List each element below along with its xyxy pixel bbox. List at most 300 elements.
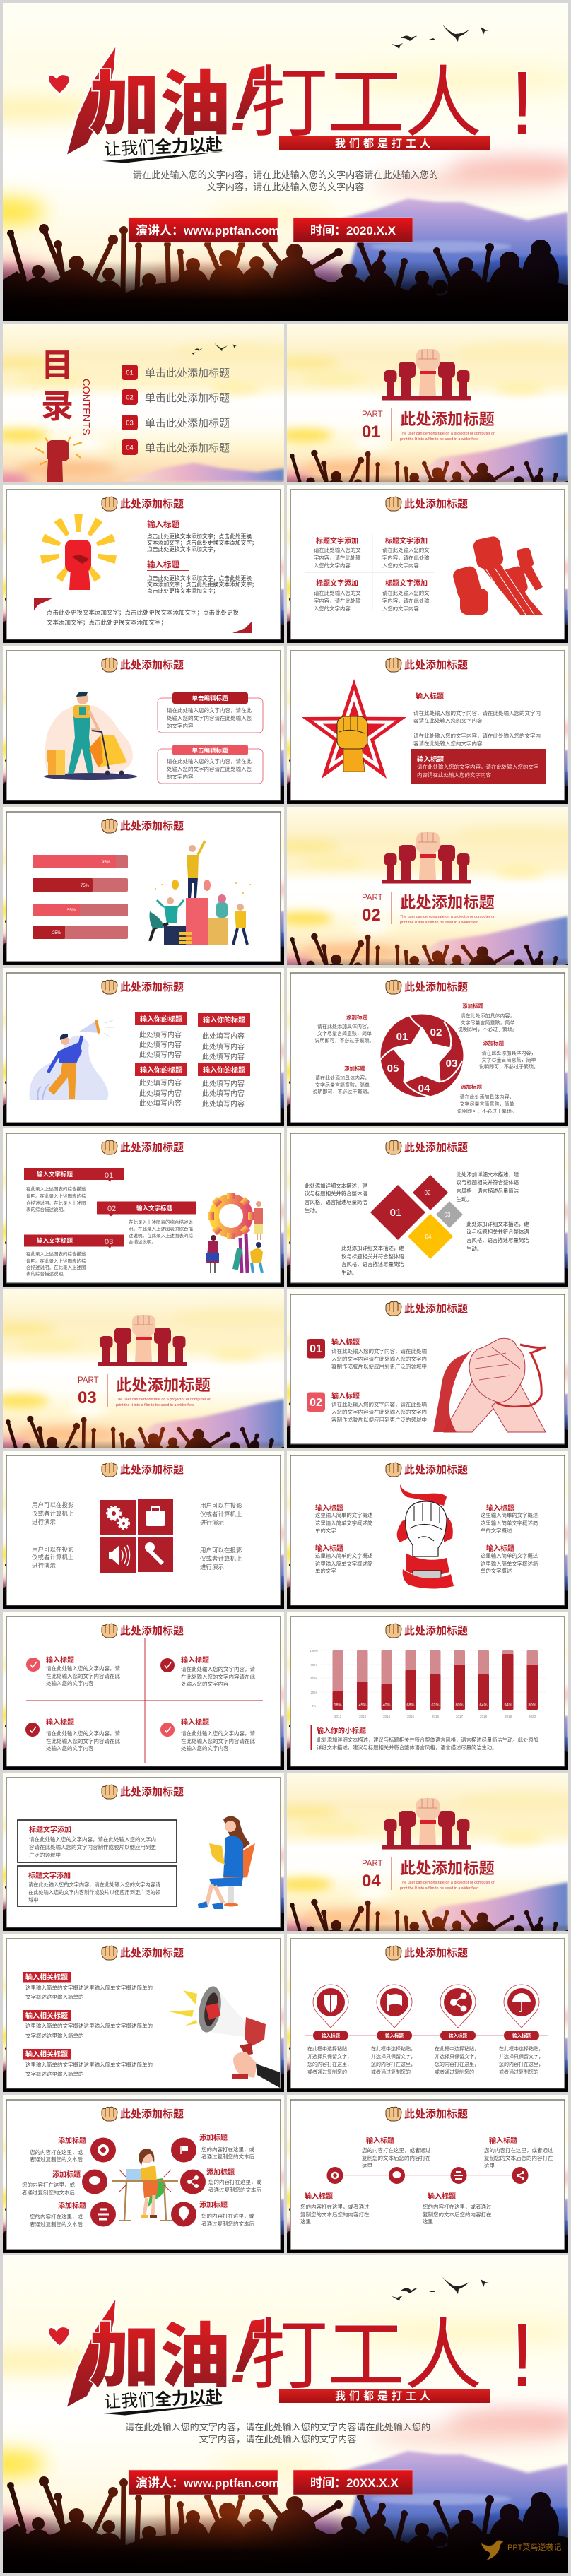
text left top: 仪或者计算机上 — [32, 1510, 74, 1517]
icon: briefcase — [146, 1507, 165, 1526]
label 2: 请在此处添加具体内容， — [315, 1075, 370, 1081]
text grid: 标题文字添加 — [316, 579, 358, 588]
chart note: 输入你的小标题 — [317, 1726, 366, 1735]
pin 4 umbrella: 输入标题 — [512, 2032, 531, 2039]
quadrant 3: 输入标题 — [46, 1718, 74, 1727]
box 2: 单击编辑标题 — [192, 747, 228, 754]
quadrant 2: 输入标题 — [181, 1655, 209, 1665]
label 1: 文字尽量言简意赅，简单 — [317, 1030, 372, 1036]
text block 2: 文本添加文字；点击此处更换文本添加文字； — [147, 581, 257, 588]
banner 2: 02 — [107, 1205, 116, 1213]
header — [102, 1785, 184, 1799]
item 01: 请在此处输入您的文字内容，请在此处输 — [331, 1347, 427, 1354]
label 2: 添加标题 — [344, 1065, 365, 1072]
node 6: 添加标题 — [199, 2200, 228, 2209]
section title: 此处添加标题 — [116, 1376, 211, 1394]
header — [102, 2107, 184, 2121]
text grid: 入您的文字内容 — [382, 562, 419, 569]
quadrant 4: 请在此处输入您的文字内容，请 — [181, 1730, 255, 1737]
illustration: fist and ribbon — [397, 1484, 454, 1589]
text 1 — [305, 1183, 367, 1214]
header — [102, 658, 184, 672]
bar chart: 94% — [504, 1703, 512, 1708]
diamonds — [370, 1175, 463, 1259]
right texts: 输入标题 — [486, 1503, 514, 1513]
banner 3: 在此录入上述图表的综合描述 — [26, 1251, 86, 1257]
banner 3: 表的综合描述说明。 — [26, 1270, 68, 1277]
slide: closing — [3, 2255, 568, 2573]
callout — [411, 749, 546, 784]
text 2: 复制您的文本后您的内容打在 — [484, 2154, 553, 2161]
left texts — [312, 1503, 373, 1574]
banner 1: 在此录入上述图表的综合描述 — [26, 1186, 86, 1192]
text 3: 此处添加详细文本描述，建 — [466, 1221, 529, 1227]
text grid: 字内容，请在此处输 — [382, 555, 430, 561]
bar chart: 50% — [310, 1677, 317, 1680]
icon: star and fist — [302, 679, 406, 779]
chart note — [311, 1725, 538, 1751]
text 2: 输入标题 — [489, 2136, 517, 2145]
text left top: 进行演示 — [32, 1518, 56, 1525]
text left bottom — [32, 1546, 74, 1569]
banner 3: 输入文字标题 — [37, 1237, 73, 1244]
item 01: 入您的文字内容请在此处输入您的文字内 — [331, 1355, 427, 1362]
pin 1 shield: 并选择只保留文字， — [307, 2053, 352, 2060]
callout: 请在此处输入您的文字内容，请在此处输入您的文字 — [417, 763, 538, 770]
list: 03 — [126, 420, 134, 427]
label 1: 请在此处添加具体内容， — [317, 1023, 372, 1029]
timeline — [305, 2035, 548, 2036]
slide: three banners and gear — [3, 1128, 284, 1287]
table: column 1: 此处填写内容 — [139, 1099, 182, 1108]
chart note: 详细文本描述，建议与标题相关并符合整体语言风格，语言描述尽量简洁生动。 — [317, 1744, 497, 1751]
label 5: 请在此处添加具体内容， — [459, 1094, 514, 1100]
text 4: 生动。 — [341, 1270, 357, 1276]
right texts: 这里输入简单文字概述简 — [481, 1561, 538, 1567]
quadrant 2: 请在此处输入您的文字内容，请 — [181, 1665, 255, 1672]
pin 4 umbrella: 您的内容打在这里， — [499, 2061, 543, 2067]
quadrant 3: 请在此处输入您的文字内容，请 — [46, 1730, 120, 1737]
icon: speaker — [109, 1545, 130, 1566]
header: 此处添加标题 — [404, 1141, 468, 1154]
framed box 1: 请在此处输入您的文字内容，请在此处输入您的文字内 — [29, 1836, 156, 1843]
list: 单击此处添加标题 — [145, 442, 230, 454]
label 5 — [457, 1083, 517, 1114]
text grid: 入您的文字内容 — [382, 605, 419, 612]
part label — [78, 1374, 107, 1407]
text left bottom: 仪或者计算机上 — [32, 1554, 74, 1561]
node 4 — [171, 2133, 254, 2162]
item 2: 文字概述这里输入简单的 — [25, 2032, 83, 2039]
slide: fist with ribbon — [287, 1451, 568, 1609]
button: time: 时间：20XX.X.X — [310, 2476, 399, 2490]
slide: map pins — [287, 1934, 568, 2092]
banner 1: 说明。在此录入上述图表的综 — [26, 1193, 86, 1199]
node 6: 您的内容打在这里，或 — [201, 2212, 254, 2219]
pin 1 shield: 输入标题 — [322, 2032, 341, 2039]
left texts: 输入标题 — [315, 1544, 343, 1553]
text grid: 字内容，请在此处输 — [314, 555, 361, 561]
description: 请在此处输入您的文字内容，请在此处输入您的文字内容请在此处输入您的 — [133, 169, 438, 180]
item 1 — [23, 1972, 153, 2000]
text 3: 议与标题相关并符合整体语 — [466, 1229, 529, 1235]
right texts: 这里输入简单文字概述简 — [481, 1520, 538, 1526]
part label — [362, 408, 392, 442]
text 3: 您的内容打在这里，或者通过 — [300, 2203, 370, 2210]
header — [102, 1624, 184, 1638]
text grid: 请在此处输入您的文 — [382, 590, 430, 596]
section title: The user can demonstrate on a projector or computer or — [400, 432, 495, 436]
list — [122, 365, 230, 455]
text: 容请在此处输入您的文字内容 — [413, 740, 483, 747]
node 1: 您的内容打在这里，或 — [30, 2149, 83, 2156]
quadrant 1: 处输入您的文字内容 — [46, 1679, 94, 1686]
item 01: 容制作成胶片以便应用到更广泛的领域中 — [331, 1362, 427, 1369]
text right bottom: 用户可以在投影 — [200, 1547, 242, 1554]
chart note: 此处添加详细文本描述，建议与标题相关并符合整体语言风格，语言描述尽量简洁生动。此处添加 — [317, 1737, 538, 1743]
item 01 — [307, 1337, 427, 1369]
text left top — [32, 1501, 74, 1525]
quadrant 2 — [160, 1655, 255, 1687]
item 01: 01 — [310, 1343, 322, 1355]
watermark: PPT菜鸟逆袭记 — [507, 2542, 561, 2552]
item 02: 入您的文字内容请在此处输入您的文字内 — [331, 1408, 427, 1415]
text 1 — [362, 2136, 431, 2169]
table: column 2: 此处填写内容 — [202, 1052, 245, 1061]
section title: print the It into a film to be used in a wider field — [400, 1886, 478, 1891]
bar chart: 25% — [52, 931, 61, 935]
illustration: woman at desk — [112, 2149, 178, 2221]
slide: part 01 — [287, 324, 568, 482]
slide: four texts and fists — [287, 485, 568, 643]
framed box 1: 广泛的领域中 — [29, 1851, 61, 1858]
banner 1 — [24, 1168, 124, 1212]
button: speaker — [129, 218, 279, 242]
quadrant 3 — [25, 1718, 120, 1751]
label 5: 添加标题 — [461, 1083, 482, 1090]
header — [386, 1624, 468, 1638]
item 3: 这里输入简单的文字概述这里输入简单文字概述简单的 — [25, 2061, 153, 2068]
description: 文字内容，请在此处输入您的文字内容 — [207, 181, 364, 192]
section title — [400, 1860, 495, 1891]
bar chart: 2015 — [407, 1715, 415, 1718]
header — [386, 1946, 468, 1960]
heading: 目录: 目 — [41, 347, 73, 384]
illustration: clasped hands with ribbon — [433, 1338, 546, 1432]
slide: column chart — [287, 1612, 568, 1770]
item 2: 输入相关标题 — [25, 2011, 68, 2021]
text 4: 此处添加详细文本描述，建 — [341, 1245, 404, 1251]
label 4: 请在此处添加具体内容， — [482, 1050, 536, 1056]
bar chart: 40% — [382, 1703, 391, 1708]
node 1: 添加标题 — [58, 2136, 86, 2145]
node 6 — [171, 2200, 254, 2227]
text 4: 言风格，语言描述尽量简洁 — [341, 1261, 404, 1268]
right texts: 这里输入简单的文字概述 — [481, 1553, 538, 1559]
header: 此处添加标题 — [120, 1463, 184, 1476]
banner 3 — [24, 1235, 124, 1277]
banner 1: 输入文字标题 — [37, 1171, 73, 1178]
section title — [400, 894, 495, 925]
node 2: 您的内容打在这里，或 — [22, 2181, 75, 2188]
part label: PART — [78, 1376, 99, 1385]
illustration: woman reading — [198, 1816, 255, 1909]
text: 请在此处输入您的文字内容，请在此处输入您的文字内 — [413, 709, 541, 716]
pin 4 umbrella: 在此框中选择粘贴， — [499, 2045, 543, 2052]
label 4 — [479, 1039, 538, 1070]
text block 2: 点击此处更换文本添加文字；点击此处更换 — [147, 574, 252, 581]
part label: 02 — [362, 906, 381, 925]
text block 1 — [147, 519, 257, 553]
text grid: 请在此处输入您的文 — [314, 590, 361, 596]
text: 容请在此处输入您的文字内容 — [413, 716, 483, 723]
label 3: 请在此处添加具体内容， — [461, 1012, 514, 1019]
text 3: 输入标题 — [305, 2192, 333, 2201]
bar chart: 80% — [455, 1703, 464, 1708]
text 2 — [484, 2136, 553, 2169]
button: time: 时间：2020.X.X — [310, 224, 396, 237]
bar chart: 2012 — [334, 1715, 342, 1718]
text right top: 仪或者计算机上 — [200, 1511, 242, 1518]
text right bottom: 进行演示 — [200, 1564, 224, 1571]
icon: heart — [48, 74, 70, 95]
ring diagram: 02 — [430, 1027, 442, 1039]
box 2: 请在此处输入您的文字内容，请在此 — [167, 757, 252, 764]
text 1: 您的内容打在这里，或者通过 — [362, 2146, 431, 2153]
table: column 2: 此处填写内容 — [202, 1099, 245, 1109]
pin 2 flag: 或者通过复制您的 — [371, 2069, 411, 2075]
bar chart: 18% — [334, 1703, 342, 1708]
text grid: 入您的文字内容 — [314, 605, 351, 612]
bar chart: 2017 — [456, 1715, 464, 1718]
item 2 — [23, 2010, 153, 2039]
slide: framed text and reading woman — [3, 1773, 284, 1931]
text 4: 复制您的文本后您的内容打在 — [423, 2211, 492, 2218]
label 5: 说明即可，不必过于繁琐。 — [457, 1108, 517, 1114]
quote block: 文本添加文字；点击此处更换文本添加文字； — [47, 619, 167, 626]
text 1: 议与标题相关并符合整体语 — [305, 1190, 367, 1197]
ring diagram — [380, 1015, 464, 1097]
icon tiles — [100, 1499, 173, 1573]
section title — [400, 410, 495, 442]
left texts: 这里输入简单文字概述简 — [315, 1561, 372, 1567]
title: 加油: 加油 — [89, 65, 230, 144]
section title: print the It into a film to be used in a wider field — [400, 921, 478, 925]
framed box 1 — [18, 1820, 177, 1862]
pin 1 shield: 您的内容打在这里， — [307, 2061, 352, 2067]
banner: 我们都是打工人 — [335, 2389, 434, 2402]
slide: diamonds — [287, 1128, 568, 1287]
node 1: 者通过复制您的文本后 — [30, 2156, 83, 2163]
quadrant 2: 处输入您的文字内容 — [181, 1680, 229, 1687]
text block 1: 点击此处更换文本添加文字；点击此处更换 — [147, 533, 252, 540]
text 4 — [423, 2192, 492, 2225]
list: 01 — [126, 369, 134, 377]
table: column 1: 输入你的标题 — [140, 1015, 182, 1024]
bar chart: 95% — [102, 861, 111, 865]
title: 加油 — [66, 44, 272, 156]
box 1 — [158, 692, 263, 733]
slide: part 03 — [3, 1289, 284, 1448]
quadrant 4: 在此处输入您的文字内容请在此 — [181, 1737, 255, 1744]
callout: 输入标题 — [417, 755, 445, 764]
text 2: 议与标题相关并符合整体语 — [457, 1179, 519, 1186]
header: 此处添加标题 — [120, 820, 184, 832]
framed box 2: 域中 — [28, 1896, 38, 1903]
text grid: 标题文字添加 — [385, 536, 428, 545]
header: 此处添加标题 — [120, 1946, 184, 1959]
header — [102, 497, 184, 511]
heading: 目录 — [41, 347, 73, 425]
label 3: 文字尽量言简意赅，简单 — [461, 1020, 514, 1026]
label 1: 添加标题 — [346, 1013, 367, 1020]
node 4: 者通过复制您的文本后 — [201, 2153, 254, 2160]
text block 2: 点击此处更换文本添加文字； — [147, 587, 218, 594]
pin 3 share: 或者通过复制您的 — [435, 2069, 474, 2075]
text 1: 此处添加详细文本描述，建 — [305, 1183, 367, 1189]
banner 3: 合描述说明。在此录入上述图 — [26, 1264, 86, 1270]
icon: key — [145, 1542, 164, 1565]
button: speaker — [129, 2470, 279, 2495]
part label: PART — [362, 410, 383, 419]
description: 文字内容，请在此处输入您的文字内容 — [199, 2433, 356, 2445]
title: 加油: 加油 — [89, 2317, 230, 2397]
framed box 2: 请在此处输入您的文字内容，请在此处输入您的文字内容请 — [28, 1881, 160, 1888]
illustration: gear and people — [206, 1193, 263, 1273]
framed box 2: 标题文字添加 — [28, 1871, 71, 1880]
part label: 03 — [78, 1388, 97, 1407]
quadrant 4 — [160, 1718, 255, 1751]
icon: fist with rays — [40, 514, 117, 590]
text 3: 生动。 — [466, 1246, 482, 1252]
right texts: 输入标题 — [486, 1544, 514, 1553]
text grid: 标题文字添加 — [316, 536, 358, 545]
text — [413, 692, 541, 747]
quadrant 3: 在此处输入您的文字内容请在此 — [46, 1737, 120, 1744]
header — [386, 980, 468, 994]
node 3: 者通过复制您的文本后 — [30, 2221, 83, 2228]
title: 打工人！: ! — [510, 53, 535, 153]
item 02: 容制作成胶片以便应用到更广泛的领域中 — [331, 1416, 427, 1423]
step icons — [326, 2167, 529, 2184]
pin 2 flag: 在此框中选择粘贴， — [371, 2045, 416, 2052]
section title: print the It into a film to be used in a wider field — [116, 1403, 194, 1407]
node 5 — [180, 2168, 261, 2194]
node 2: 添加标题 — [52, 2170, 81, 2179]
right texts: 单的文字概述 — [481, 1528, 512, 1534]
banner 1: 01 — [105, 1171, 113, 1180]
framed box 2 — [18, 1866, 177, 1906]
left texts: 单的文字 — [315, 1528, 336, 1534]
text 1: 输入标题 — [366, 2136, 394, 2145]
label 3: 说明即可，不必过于繁琐。 — [458, 1026, 517, 1032]
table: column 2: 输入你的标题 — [203, 1015, 245, 1024]
slide: five-part ring — [287, 968, 568, 1126]
bar chart: 75% — [310, 1663, 317, 1667]
bar chart: 25% — [310, 1691, 317, 1694]
label 1: 说明即可，不必过于繁琐。 — [315, 1037, 375, 1044]
header — [386, 1140, 468, 1154]
slide: part 02 — [287, 807, 568, 965]
node 3 — [30, 2201, 116, 2228]
box 2: 处输入您的文字内容请在此处输入您 — [167, 765, 252, 772]
banner 3: 说明。在此录入上述图表的综 — [26, 1258, 86, 1264]
box 1: 请在此处输入您的文字内容，请在此 — [167, 707, 252, 714]
title: 打工人！: 打工人 — [250, 2312, 481, 2399]
header: 此处添加标题 — [120, 981, 184, 993]
bar chart: 2013 — [359, 1715, 367, 1718]
label 2: 文字尽量言简意赅，简单 — [315, 1082, 370, 1088]
item 1: 输入相关标题 — [25, 1973, 68, 1982]
slide: megaphone — [3, 1934, 284, 2092]
node 4: 添加标题 — [199, 2133, 228, 2142]
button: speaker: 演讲人：www.pptfan.com — [136, 223, 279, 237]
table: column 2: 此处填写内容 — [202, 1032, 245, 1041]
pin 3 share: 并选择只保留文字， — [435, 2053, 479, 2060]
label 3: 添加标题 — [462, 1002, 483, 1009]
banner 1: 表的综合描述说明。 — [26, 1206, 68, 1212]
header: 此处添加标题 — [120, 1141, 184, 1154]
quadrant 1: 在此处输入您的文字内容请在此 — [46, 1672, 120, 1679]
text 4: 这里 — [423, 2218, 433, 2225]
header — [102, 980, 184, 994]
section title: The user can demonstrate on a projector or computer or — [116, 1398, 211, 1402]
text: 输入标题 — [416, 692, 444, 701]
text block 2: 输入标题 — [147, 560, 179, 569]
bar chart: 2016 — [432, 1715, 440, 1718]
part label: 04 — [362, 1872, 381, 1891]
header: 此处添加标题 — [404, 497, 468, 510]
table: column 2: 输入你的标题 — [203, 1065, 245, 1075]
header — [102, 819, 184, 833]
CONTENTS: CONTENTS — [80, 379, 91, 435]
list: 单击此处添加标题 — [145, 392, 230, 404]
header — [386, 497, 468, 511]
icon: gears — [107, 1506, 129, 1529]
illustration: podium — [150, 841, 251, 945]
header: 此处添加标题 — [120, 2108, 184, 2120]
label 4: 文字尽量言简意赅，简单 — [482, 1057, 536, 1063]
text 2: 此处添加详细文本描述，建 — [457, 1171, 519, 1178]
bar chart: 75% — [81, 884, 90, 888]
text left bottom: 进行演示 — [32, 1562, 56, 1569]
item 3: 文字概述这里输入简单的 — [25, 2070, 83, 2077]
bar chart: 45% — [358, 1703, 367, 1708]
item 3 — [23, 2049, 153, 2077]
cross axes — [26, 1638, 263, 1763]
text 2: 这里 — [484, 2162, 495, 2169]
box 2 — [158, 745, 263, 784]
text grid: 请在此处输入您的文 — [382, 547, 430, 553]
section title: 此处添加标题 — [400, 894, 495, 911]
node 2: 者通过复制您的文本后 — [22, 2189, 75, 2196]
description — [125, 2421, 430, 2445]
quadrant 2: 在此处输入您的文字内容请在此 — [181, 1673, 255, 1680]
banner — [279, 136, 490, 150]
header: 此处添加标题 — [120, 1785, 184, 1798]
section title: The user can demonstrate on a projector or computer or — [400, 915, 495, 919]
header — [102, 1140, 184, 1154]
pin 3 share: 在此框中选择粘贴， — [435, 2045, 479, 2052]
part label — [362, 892, 392, 925]
box 1: 处输入您的文字内容请在此处输入您 — [167, 714, 252, 721]
item 2: 这里输入简单的文字概述这里输入简单文字概述简单的 — [25, 2022, 153, 2029]
header: 此处添加标题 — [120, 497, 184, 510]
text: 请在此处输入您的文字内容，请在此处输入您的文字内 — [413, 732, 541, 739]
text right top: 进行演示 — [200, 1519, 224, 1526]
bar chart: 2014 — [383, 1715, 391, 1718]
bar chart: 68% — [406, 1703, 415, 1708]
